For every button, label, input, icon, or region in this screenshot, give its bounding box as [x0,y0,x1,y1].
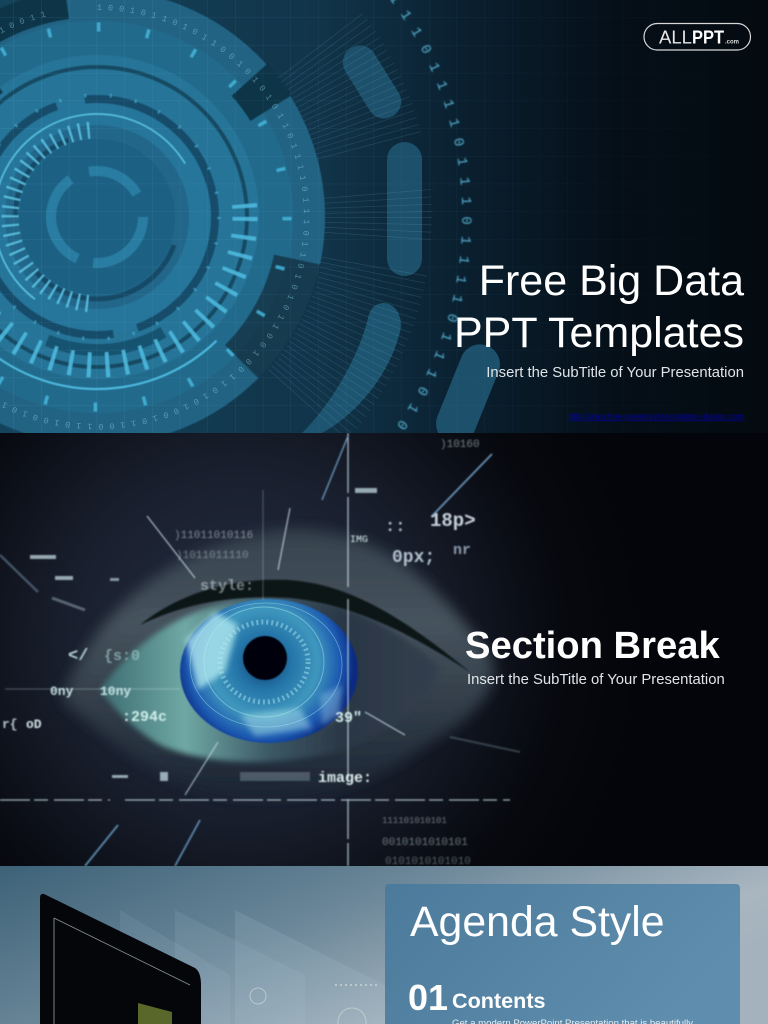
iris [180,599,358,743]
floating code fragments: 0ny [50,684,74,699]
circular dial [0,0,326,433]
floating code fragments: image: [318,770,372,787]
agenda slide background [0,866,768,1024]
title: Free Big Data PPT Templates: PPT Templates [454,309,744,357]
light streaks and data lines [0,433,520,866]
item title: Contents [452,988,546,1013]
link: http://www.free-powerpoint-templates-design.com [569,412,744,421]
floating code fragments: )10160 [440,439,480,451]
agenda card [385,884,740,1024]
iris highlights [190,603,342,727]
item number: 01 [408,977,448,1018]
pupil [243,636,287,680]
logo: ALLPPT: ALL [659,28,692,48]
laptop [40,894,201,1024]
floating code fragments: :: [385,518,405,537]
floating code fragments: 0101010101010 [385,856,471,868]
floating code fragments: 10ny [100,684,131,699]
sclera [100,596,440,762]
floating code fragments: 111101010101 [382,816,447,826]
panel: section break slide [0,433,768,868]
title: Free Big Data PPT Templates: Free Big Data [479,257,744,305]
eye illustration [62,530,494,798]
floating code fragments: r{ [2,717,18,732]
dark outer sectors [0,0,320,378]
upper lash line [140,580,470,672]
subtitle: Insert the SubTitle of Your Presentation [467,672,725,688]
floating code fragments: nr [453,542,471,559]
floating code fragments: )1011011110 [176,550,249,562]
floating code fragments: 0010101010101 [382,837,468,849]
decorative pills around the dial [302,39,506,450]
grid overlay [0,0,622,433]
screen gauge icons [250,985,380,1024]
floating code fragments: :294c [122,709,167,726]
fine radial fan lines [268,13,432,433]
panel: title slide [0,0,768,433]
floating code fragments [2,439,480,868]
section slide background [0,433,768,866]
floating code fragments: {s:0 [104,648,140,665]
eye lid and skin [62,530,494,798]
floating code fragments: )11011010116 [174,530,253,542]
logo: ALLPPT: .com [725,40,739,46]
floating code fragments: style: [200,578,254,595]
floating code fragments: </ [68,647,88,666]
floating code fragments: 39" [335,710,362,727]
logo: ALLPPT [644,24,750,50]
floating code fragments: 18p> [430,510,476,532]
subtitle: Insert the SubTitle of Your Presentation [486,365,744,381]
panel: agenda slide [0,866,768,1024]
floating code fragments: 0px; [392,548,435,568]
bright iris patches [186,612,342,736]
floating code fragments: IMG [350,535,368,546]
floating code fragments: oD [26,717,42,732]
heading: Section Break: Section Break [465,624,720,667]
translucent screens [120,910,328,1024]
blurred data blocks [30,488,377,781]
logo: ALLPPT: PPT [692,28,724,48]
heading: Agenda Style: Agenda Style [410,898,665,946]
title slide background [0,0,768,433]
laptop screen chart [54,918,190,985]
